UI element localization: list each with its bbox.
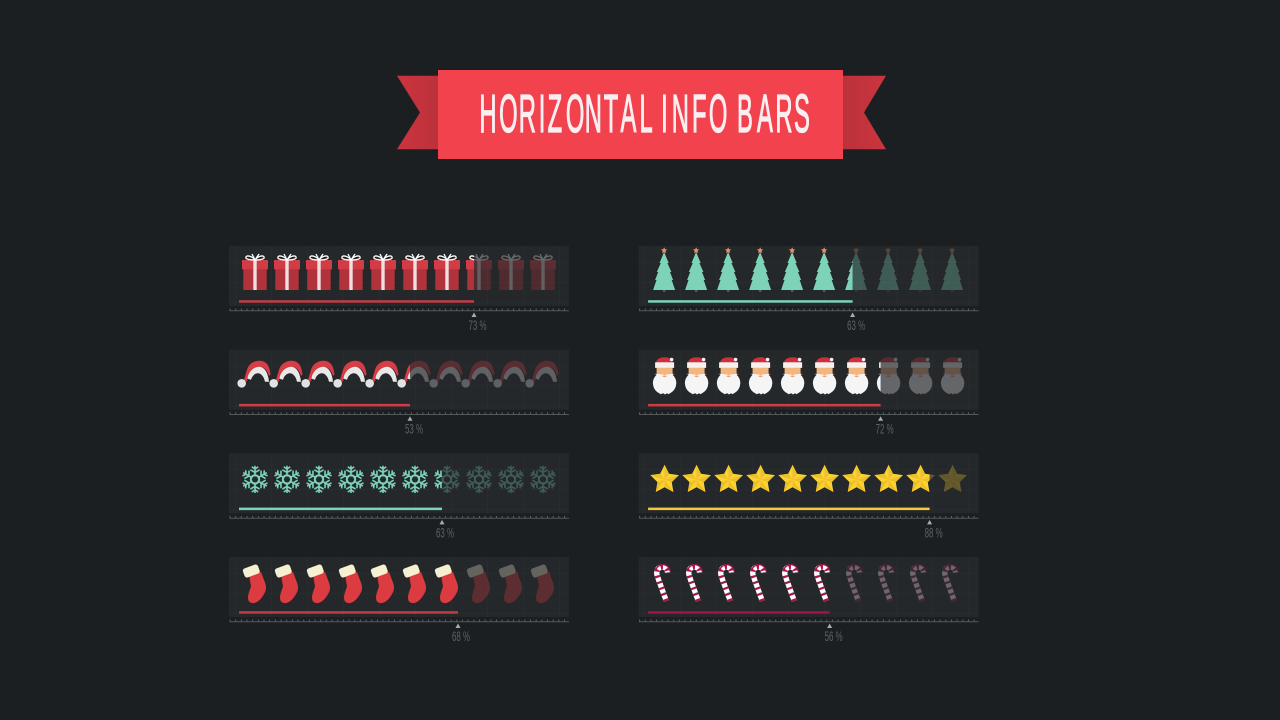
panel: snowflakes 63% — [229, 453, 569, 540]
icon row: hats — [237, 361, 558, 388]
marker — [456, 624, 460, 628]
panel: stars 88% — [639, 453, 979, 540]
icon row: stockings — [242, 564, 554, 603]
title banner — [397, 70, 886, 159]
ribbon right tail — [843, 76, 886, 149]
icon row: santas — [653, 357, 964, 394]
ruler — [230, 621, 569, 622]
panel: stockings 68% — [229, 557, 569, 644]
progress bar — [648, 508, 930, 510]
value: 88 % — [925, 524, 943, 540]
ruler — [639, 413, 979, 414]
value: 56 % — [825, 628, 843, 644]
panel: candy canes 56% — [639, 557, 979, 644]
ruler — [230, 310, 569, 311]
panel: santa faces 72% — [639, 350, 979, 437]
marker — [850, 312, 855, 317]
value: 68 % — [452, 628, 470, 644]
progress bar — [239, 611, 458, 614]
ruler — [230, 517, 569, 518]
marker — [927, 520, 932, 524]
marker — [440, 520, 444, 524]
value: 73 % — [468, 317, 486, 333]
ruler — [639, 310, 979, 311]
title: INFO — [661, 83, 727, 144]
value: 72 % — [876, 421, 894, 437]
marker — [827, 624, 832, 628]
marker — [472, 312, 476, 317]
icon row: stars — [650, 465, 967, 492]
icon row: snowflakes — [241, 466, 557, 493]
progress bar — [648, 300, 853, 303]
title: BARS — [737, 83, 810, 144]
marker — [408, 416, 412, 421]
progress bar — [239, 404, 410, 406]
title: HORIZONTAL — [479, 83, 653, 144]
value: 63 % — [847, 317, 865, 333]
ruler — [639, 621, 979, 622]
progress bar — [239, 508, 442, 510]
progress bar — [648, 404, 881, 406]
icon row: candy canes — [656, 565, 958, 601]
ruler — [639, 517, 979, 518]
ruler — [230, 413, 569, 414]
panel: gifts 73% — [229, 246, 569, 333]
value: 63 % — [436, 524, 454, 540]
icon row: trees — [653, 247, 963, 292]
panel: trees 63% — [639, 246, 979, 333]
ribbon left tail — [397, 76, 438, 149]
icon row: gifts — [242, 254, 556, 290]
banner body — [438, 70, 843, 159]
value: 53 % — [405, 421, 423, 437]
progress bar — [239, 300, 474, 303]
marker — [878, 416, 883, 421]
panel: santa hats 53% — [229, 350, 569, 437]
progress bar — [648, 611, 830, 614]
